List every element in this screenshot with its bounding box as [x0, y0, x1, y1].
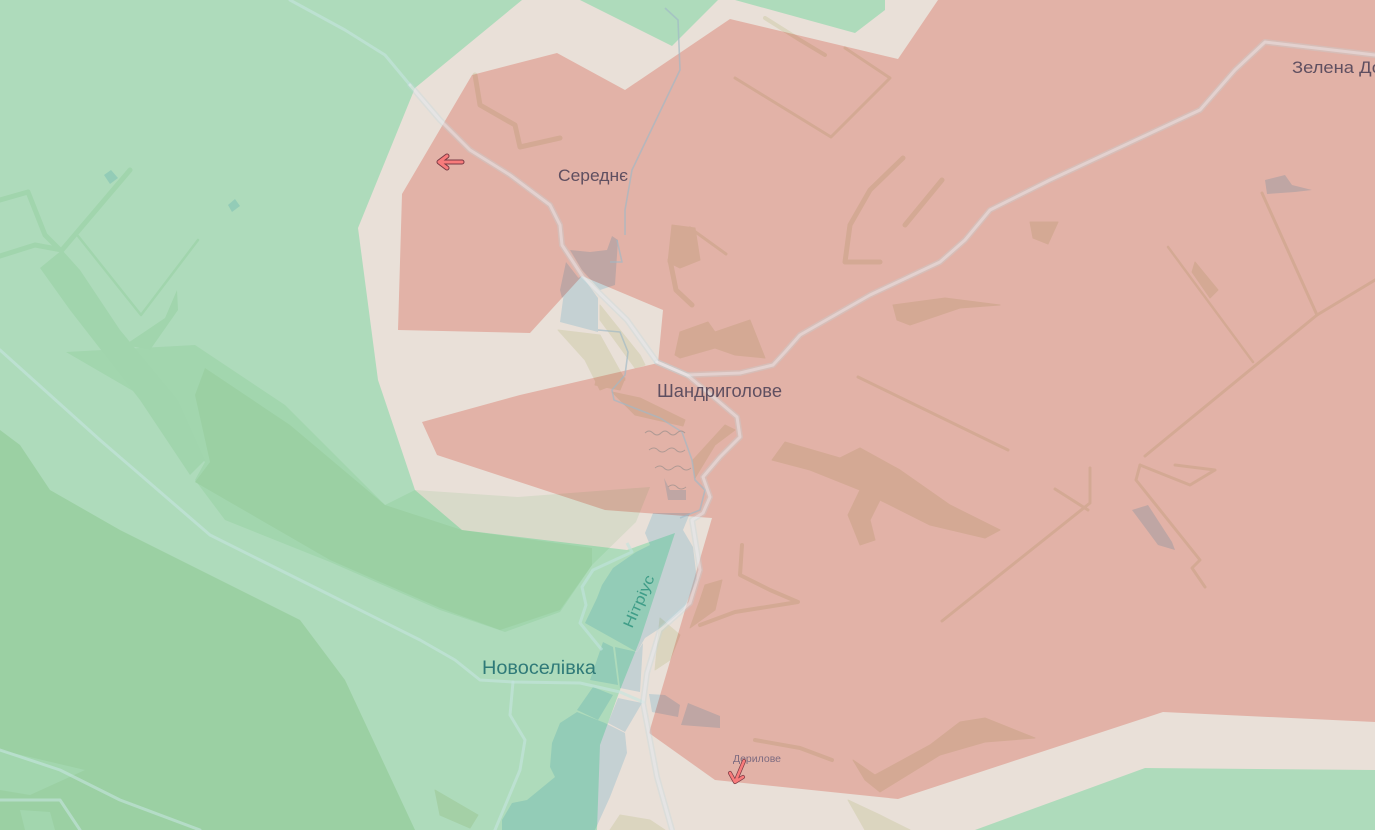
label: Nitrius reservoir: Нітріус [620, 572, 659, 631]
stream: west of reservoir [580, 543, 632, 650]
pond: Seredne [570, 236, 618, 290]
water bodies [104, 170, 1312, 830]
forest: darker central block [195, 368, 592, 630]
pond: east [1265, 175, 1312, 194]
reservoir: Nitrius lower [502, 712, 627, 830]
arrow: west attack [439, 156, 462, 168]
label: Shandryholove: Шандриголове [657, 381, 782, 401]
reservoir: Nitrius middle [615, 643, 643, 692]
forest: large south-west [0, 430, 415, 830]
pond: Shandryholove [664, 478, 686, 500]
panel: red occupied territory [398, 0, 1375, 799]
rivers [598, 8, 705, 518]
forest: north-west gully [40, 250, 205, 475]
ponds: north-west [104, 170, 118, 184]
label: Derylove: Дерилове [733, 754, 781, 765]
reservoir: Nitrius upper [585, 513, 697, 652]
forest: central west [66, 345, 650, 632]
forest: south-west strip [0, 750, 85, 795]
tree lines in red zone [475, 18, 1375, 760]
marsh symbols [645, 431, 691, 489]
label: Zelena Dolyna: Зелена До [1292, 58, 1375, 77]
label: Novoselivka: Новоселівка [482, 658, 596, 679]
arrow: south-west attack [730, 761, 744, 782]
ponds: south [649, 694, 680, 717]
label: Seredne: Середнє [558, 166, 628, 185]
